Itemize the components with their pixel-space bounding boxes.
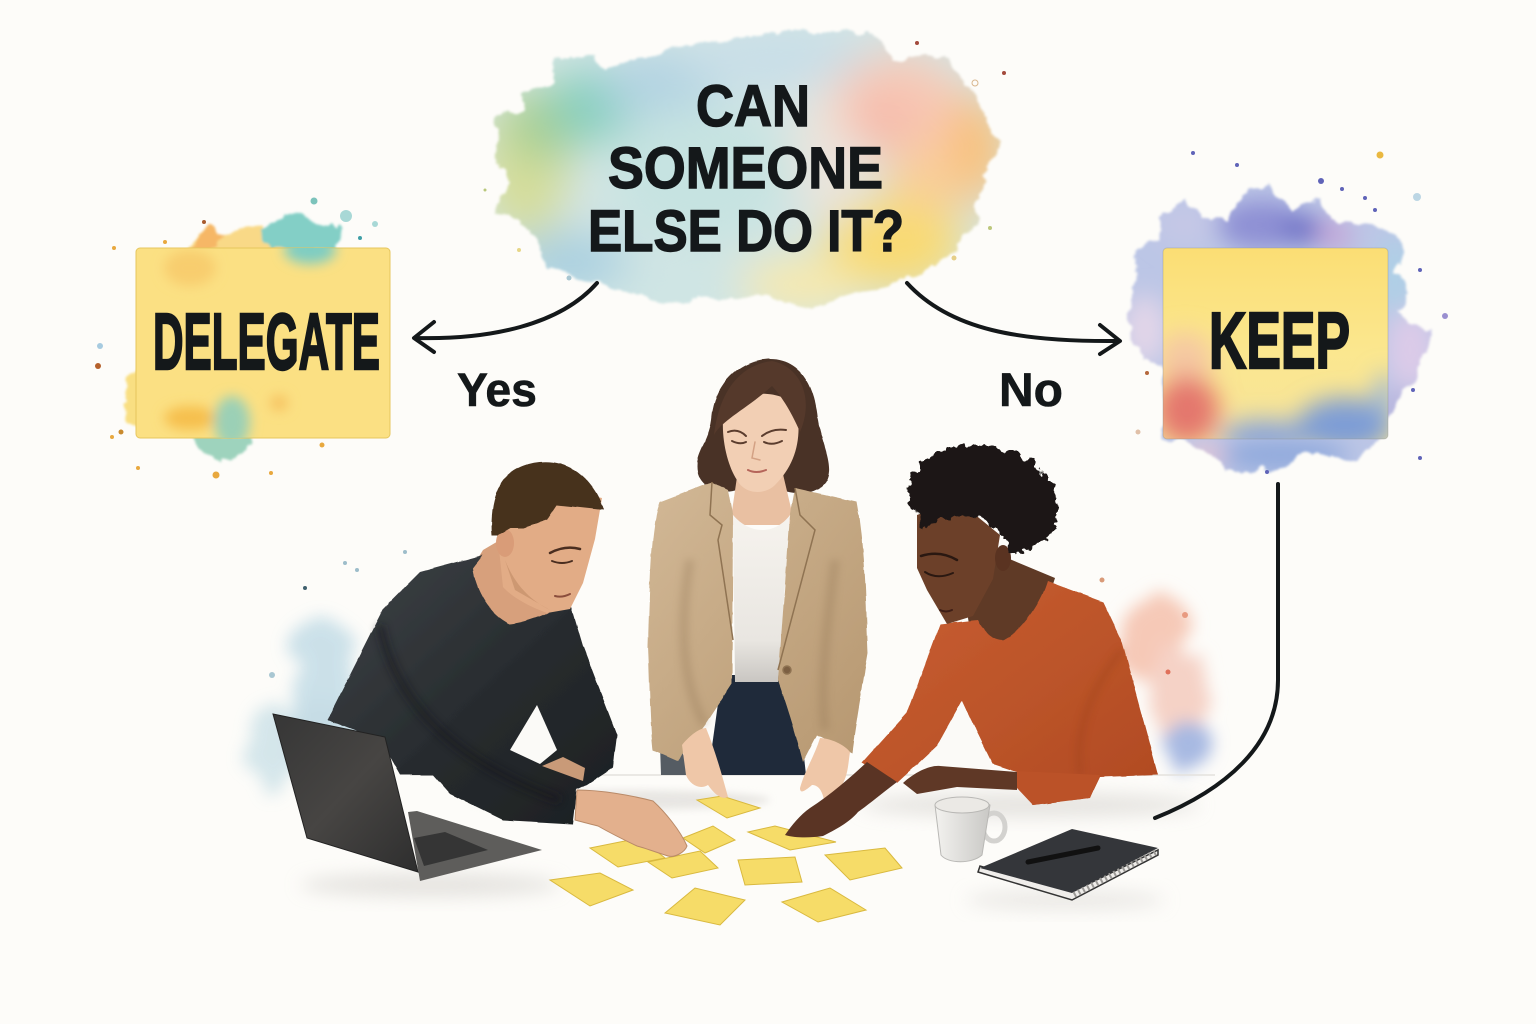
laptop screen [273, 714, 418, 872]
figure: center woman [648, 359, 868, 800]
mug rim [935, 797, 989, 813]
sleeve cuff [1017, 771, 1100, 805]
notebook pages [978, 850, 1158, 900]
paint splatter: delegate [95, 198, 378, 478]
face [723, 394, 799, 492]
face [917, 500, 1000, 624]
heading: can someone else do it: ELSE DO IT? [588, 199, 904, 264]
arrow: yes to delegate [414, 283, 597, 352]
sticky note: keep [1163, 248, 1388, 439]
notebook cover [980, 829, 1158, 893]
left hand [682, 728, 728, 798]
arrow: no to keep [907, 283, 1120, 354]
face shadow [505, 560, 550, 610]
blazer shading [684, 560, 835, 730]
blazer left hem [660, 745, 690, 775]
note outline [1163, 248, 1388, 439]
trousers [708, 675, 806, 775]
blazer [648, 482, 868, 762]
splatter: around figures [269, 550, 1188, 678]
label: no: No [999, 363, 1063, 416]
mug body [935, 798, 990, 862]
neck [730, 470, 795, 525]
coffee mug [935, 797, 1005, 862]
hand [575, 790, 687, 856]
orange sweater [862, 581, 1158, 805]
ear [995, 545, 1011, 571]
label: yes: Yes [457, 363, 537, 416]
sticky notes on table [550, 796, 902, 925]
hair [492, 462, 604, 535]
hair front [714, 361, 806, 435]
forearm [542, 757, 585, 781]
table surface [300, 775, 1215, 910]
background wash: behind right woman [1119, 598, 1216, 773]
mug handle [983, 813, 1005, 841]
figure: right woman [785, 446, 1158, 837]
cloud splatter [484, 41, 1006, 280]
hair back [697, 359, 829, 493]
notebook and pen [978, 829, 1158, 900]
white top [733, 515, 790, 682]
heading: can someone else do it [588, 74, 904, 264]
spiral binding [1074, 851, 1158, 895]
watercolor wash: keep [1126, 183, 1433, 474]
face [497, 485, 602, 613]
neck [965, 555, 1055, 650]
heading: can someone else do it: SOMEONE [608, 136, 883, 201]
sleeve shading [380, 625, 560, 800]
pen [1028, 848, 1098, 862]
gap under arm [915, 701, 993, 768]
neck [472, 540, 572, 628]
watercolor wash: question cloud [492, 28, 1002, 310]
panel: question cloud [484, 28, 1006, 310]
sticky note: delegate [136, 248, 390, 438]
paint splatter: keep [1136, 151, 1448, 474]
label: delegate: DELEGATE [153, 297, 380, 386]
forearm and hand: pointing [785, 762, 897, 837]
face features [921, 554, 957, 612]
connector: keep down to notebook [1155, 484, 1278, 818]
face features [728, 430, 786, 472]
background wash: behind man [247, 610, 370, 790]
laptop base [408, 811, 542, 881]
gap between arm and body [510, 705, 557, 764]
right hand [800, 738, 850, 800]
face features [550, 548, 580, 597]
heading: can someone else do it: CAN [696, 74, 810, 139]
ear [496, 529, 514, 557]
forearm: resting [903, 766, 1017, 794]
figure: left man [327, 462, 687, 856]
sweater fold [1079, 650, 1122, 775]
note tint: red and blue [1163, 328, 1388, 439]
lapels and button [710, 482, 815, 674]
label: keep: KEEP [1209, 296, 1350, 385]
watercolor splashes: delegate outside note [125, 213, 338, 463]
note tint: teal and orange [164, 236, 336, 448]
afro hair [908, 446, 1058, 555]
panel: delegate [95, 198, 390, 478]
laptop [273, 714, 542, 881]
keyboard [414, 832, 488, 866]
sweater [327, 555, 617, 824]
panel: keep [1126, 151, 1448, 474]
